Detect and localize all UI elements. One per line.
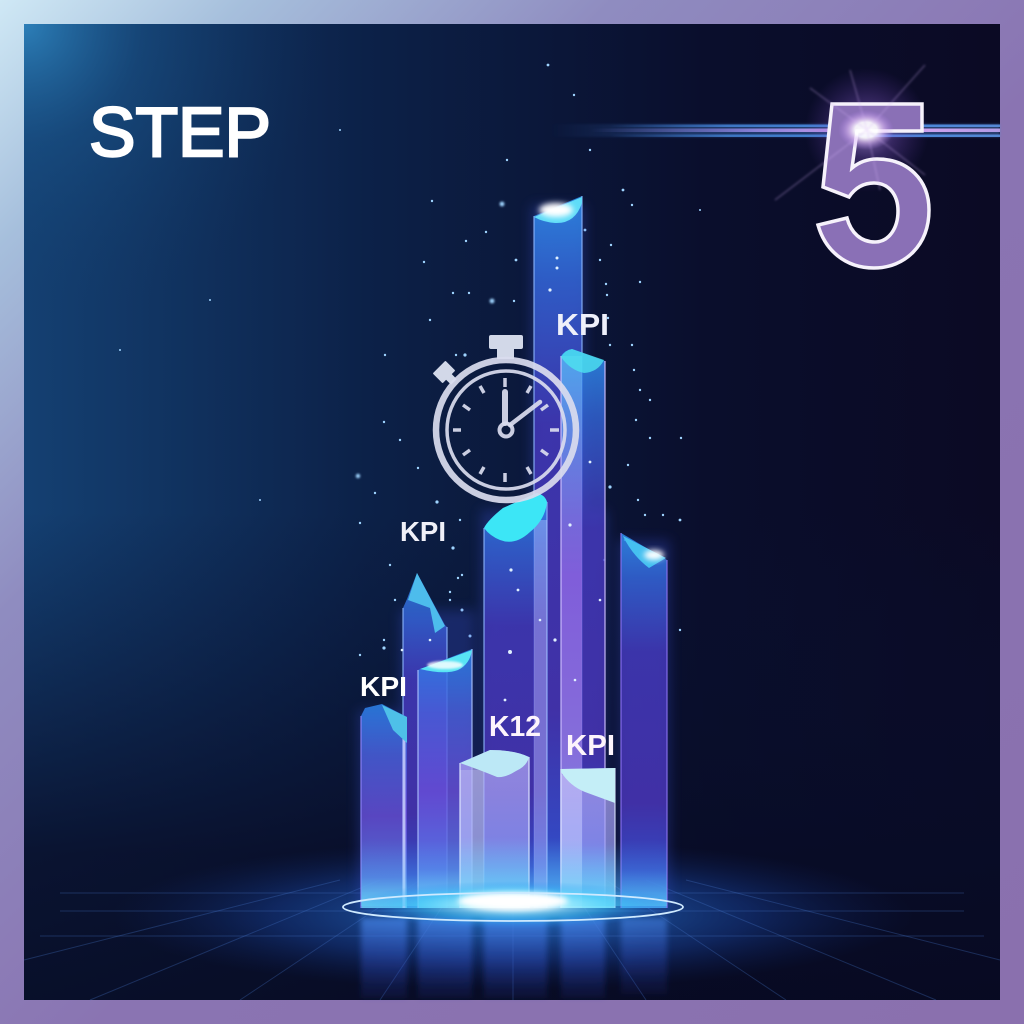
label: KPI right: KPI	[566, 730, 615, 762]
bar: right of stopwatch	[561, 349, 605, 908]
bar: far right	[621, 533, 667, 908]
heading: STEP: STEP	[89, 93, 271, 171]
label: KPI left: KPI	[360, 671, 407, 702]
bar: left small	[361, 704, 407, 908]
bar: left tall light	[418, 649, 472, 908]
label: KPI middle: KPI	[400, 516, 446, 547]
bar: right short	[561, 768, 615, 908]
base ring and glow	[343, 840, 683, 929]
foreground particles on bars	[401, 256, 601, 701]
number 5	[818, 104, 929, 268]
label: K12: K12	[489, 711, 541, 743]
bar: K12	[460, 750, 529, 908]
label: KPI top: KPI	[556, 307, 609, 342]
horizontal light streak	[550, 124, 1000, 137]
lens flare core	[775, 65, 925, 200]
icon: stopwatch	[433, 335, 576, 500]
bar: pointed	[403, 573, 447, 908]
floor grid with glow	[24, 840, 1000, 1000]
bar: tallest	[534, 196, 582, 908]
floor reflection of bars	[361, 918, 667, 998]
soft glow behind bars	[358, 205, 670, 906]
bar: centre	[484, 493, 547, 908]
lens flare glow behind number	[805, 68, 929, 192]
star particles	[119, 64, 701, 656]
